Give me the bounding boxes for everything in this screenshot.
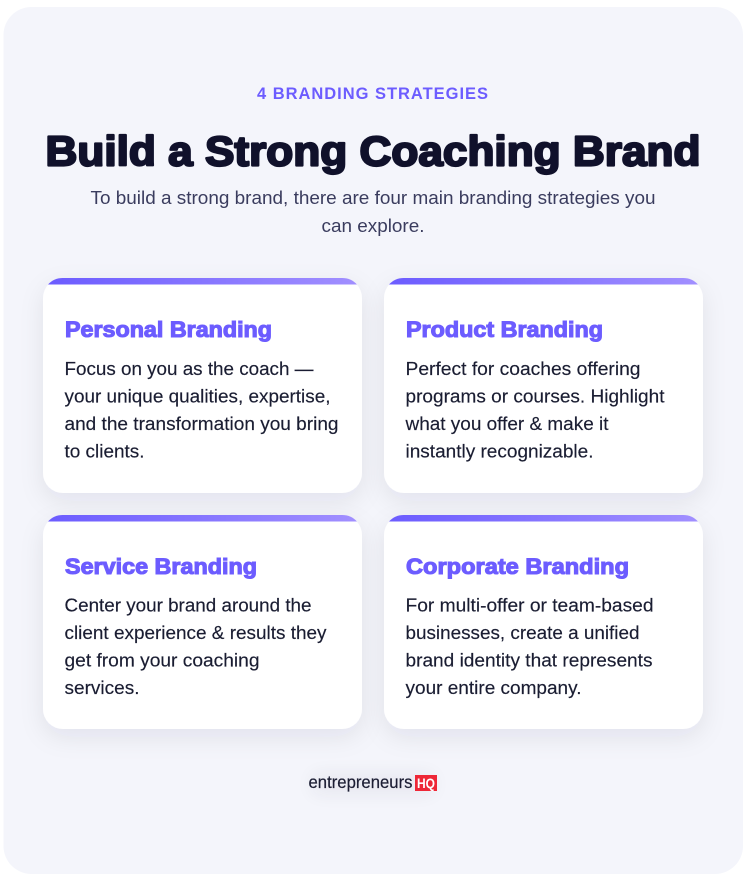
card text: Service Branding: [64, 594, 327, 698]
card text: Personal Branding: and the transformation you bring: [64, 413, 338, 434]
card text: Personal Branding: to clients.: [64, 440, 144, 462]
card text: Corporate Branding: [406, 594, 654, 698]
card heading: Service Branding: Service Branding: [65, 554, 257, 579]
subtitle: [90, 187, 656, 236]
card text: Corporate Branding: your entire company.: [406, 677, 582, 698]
card text: Product Branding: Perfect for coaches offering: [406, 358, 640, 379]
card text: Product Branding: instantly recognizable.: [406, 440, 594, 462]
card text: Service Branding: services.: [64, 677, 140, 698]
card text: Corporate Branding: For multi-offer or team-based: [406, 594, 654, 616]
card text: Personal Branding: your unique qualities, expertise,: [64, 386, 330, 406]
card text: Product Branding: [404, 358, 664, 462]
panel: Service Branding card: [43, 515, 362, 729]
card text: Service Branding: Center your brand around the: [64, 594, 312, 616]
panel: Product Branding card: [384, 278, 703, 493]
card text: Service Branding: get from your coaching: [64, 650, 260, 670]
subtitle: can explore.: [322, 215, 424, 236]
panel: Personal Branding card: [43, 278, 362, 493]
card heading: Product Branding: Product Branding: [406, 317, 603, 342]
card text: Corporate Branding: businesses, create a unified: [406, 622, 640, 643]
panel: Corporate Branding card: [384, 515, 703, 729]
subtitle: To build a strong brand, there are four main branding strategies you: [90, 187, 656, 208]
card text: Personal Branding: Focus on you as the coach —: [64, 358, 314, 379]
card heading: Corporate Branding: Corporate Branding: [406, 554, 629, 579]
card text: Personal Branding: [64, 358, 338, 462]
title: Build a Strong Coaching Brand: [46, 128, 700, 174]
card text: Product Branding: programs or courses. Highlight: [406, 386, 664, 406]
card text: Corporate Branding: brand identity that represents: [406, 650, 652, 670]
logo: entrepreneursHQ: HQ: [417, 776, 435, 791]
card text: Product Branding: what you offer & make it: [404, 413, 608, 434]
logo: entrepreneursHQ: entrepreneurs: [308, 772, 413, 792]
card heading: Personal Branding: Personal Branding: [65, 317, 272, 342]
eyebrow label: 4 BRANDING STRATEGIES: [257, 85, 488, 103]
card text: Service Branding: client experience & results they: [64, 622, 327, 643]
